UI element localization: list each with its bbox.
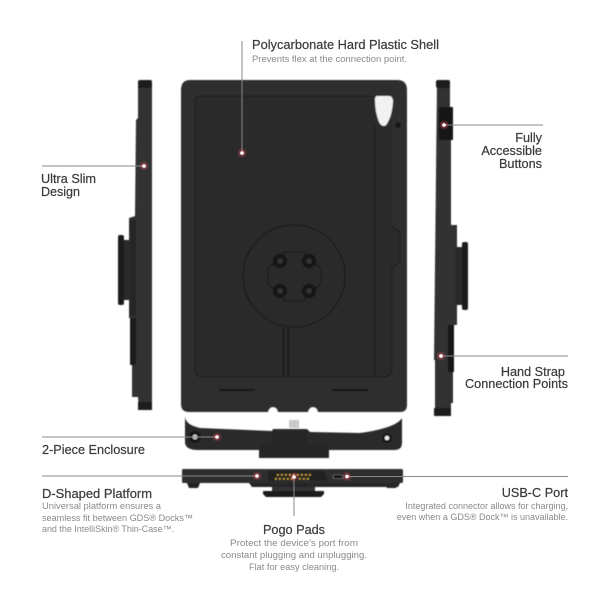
screws: [274, 254, 316, 298]
text: d-shaped platform: and the IntelliSkin® Thin-Case™.: [42, 524, 174, 534]
text: fully accessible buttons: Accessible: [481, 144, 542, 158]
pogo pins: [275, 474, 311, 480]
text: d-shaped platform: Universal platform ensures a: [42, 501, 161, 511]
text: pogo pads: [221, 523, 367, 572]
text: pogo pads: Protect the device’s port from: [230, 538, 358, 548]
text: usb-c port: [397, 486, 568, 522]
text: ultra slim: [41, 172, 96, 199]
camera cutout: [375, 96, 393, 126]
text: usb-c port: Integrated connector allows for charging,: [405, 501, 568, 511]
text: fully accessible buttons: Buttons: [499, 157, 542, 171]
text: hand strap: Connection Points: [465, 377, 568, 391]
mount circle: [243, 225, 345, 327]
text: ultra slim: Design: [41, 185, 80, 199]
text: ultra slim: Ultra Slim: [41, 172, 96, 186]
text: usb-c port: even when a GDS® Dock™ is unavailable.: [397, 512, 568, 522]
text: d-shaped platform: D-Shaped Platform: [42, 487, 152, 501]
strap slots: [219, 389, 255, 391]
text: pogo pads: Flat for easy cleaning.: [249, 562, 339, 572]
text: hand strap: [465, 365, 568, 391]
text: pogo pads: constant plugging and unplugging.: [221, 550, 367, 560]
side view: left: [118, 80, 152, 410]
callout lines: [42, 41, 568, 516]
USB-C opening: [333, 475, 343, 478]
D-shaped platform: top view: [182, 469, 403, 497]
text: polycarbonate shell: Prevents flex at the connection point.: [252, 54, 407, 64]
text: polycarbonate shell: [252, 38, 439, 64]
text: fully accessible buttons: [481, 131, 543, 171]
callout dots: [139, 120, 449, 482]
text: hand strap: Hand Strap: [501, 365, 565, 379]
text: 2-piece enclosure: 2-Piece Enclosure: [42, 443, 145, 457]
tablet case: back view: [181, 80, 407, 412]
text: polycarbonate shell: Polycarbonate Hard Plastic Shell: [252, 38, 439, 52]
text: pogo pads: Pogo Pads: [263, 523, 325, 537]
text: d-shaped platform: [42, 487, 193, 534]
enclosure bottom piece: [185, 417, 402, 458]
side view: right: [434, 80, 468, 416]
text: usb-c port: USB-C Port: [502, 486, 568, 500]
text: d-shaped platform: seamless fit between GDS® Docks™: [42, 513, 193, 523]
text: fully accessible buttons: Fully: [515, 131, 543, 145]
